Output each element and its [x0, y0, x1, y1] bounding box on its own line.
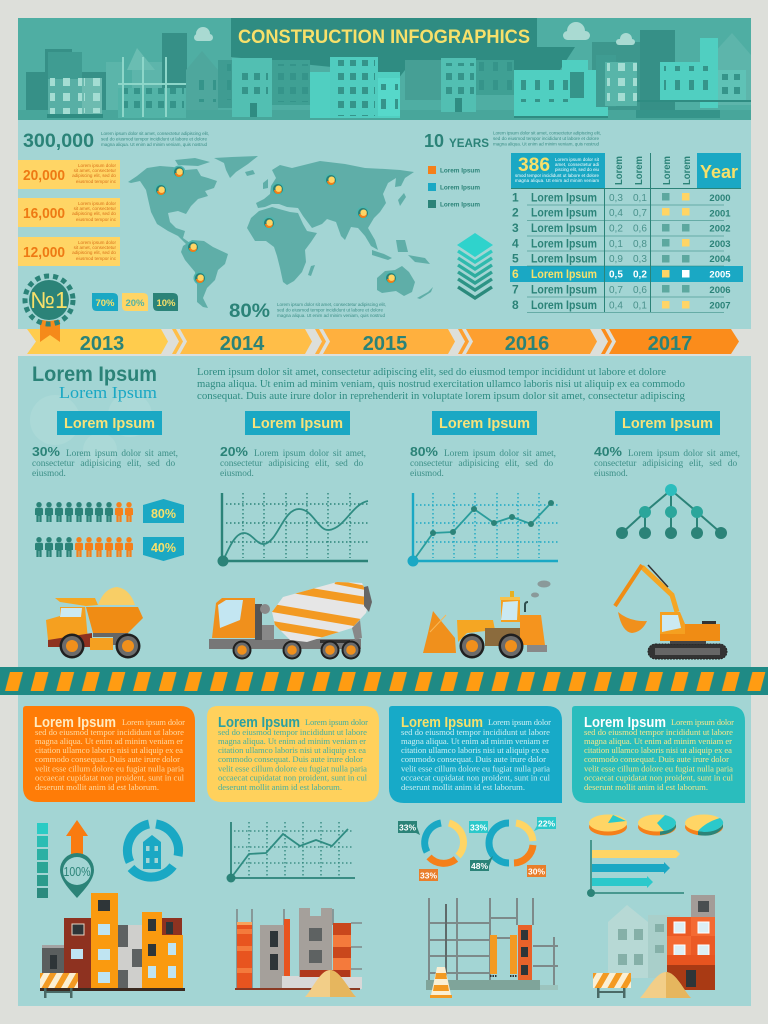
- pie chart 3: [685, 814, 723, 836]
- card: teal: velit esse cillum dolore eu fugiat nulla paria: [584, 764, 733, 774]
- column heading 2: Lorem Ipsum: [252, 416, 343, 432]
- donut chart 1: [425, 823, 463, 863]
- stat: 10 years: Lorem ipsum dolor sit amet, consectetur adipiscing elit,: [493, 130, 601, 136]
- card: teal: commodo consequat. Duis aute irure dolor: [584, 754, 729, 764]
- row values: 0,4: [609, 300, 623, 312]
- line chart: bottom: [226, 822, 355, 882]
- gradient scale squares: [37, 823, 48, 898]
- card: blue: Lorem ipsum dolor: [488, 717, 551, 727]
- timeline segment: 2013: 2013: [80, 333, 124, 355]
- column text 3: Lorem ipsum dolor sit amet,: [444, 449, 556, 459]
- stat box: 20,000: [18, 160, 120, 189]
- row numbers and labels: [512, 190, 597, 312]
- row values: 0,3: [633, 254, 647, 265]
- row numbers and labels: 2: [512, 206, 519, 220]
- stat box: 12,000: eiusmod tempor inc: [76, 256, 117, 261]
- stat: 10 years: YEARS: [449, 138, 489, 150]
- row values: 0,4: [609, 208, 623, 219]
- column heading 3: [432, 411, 537, 435]
- icon: up arrow: [66, 820, 88, 854]
- column heading 2: [245, 411, 350, 435]
- row numbers and labels: 1: [512, 190, 519, 204]
- row values: 0,7: [609, 285, 623, 296]
- card: orange: magna aliqua. Ut enim ad minim veniam er: [35, 736, 183, 746]
- row numbers and labels: 4: [512, 236, 519, 250]
- timeline segment: 2017: 2017: [648, 333, 692, 355]
- illustration: orange building block: [40, 893, 185, 998]
- illustration: block under construction: [235, 908, 362, 997]
- donut label: 48% dark: [470, 856, 493, 871]
- column text 2: consectetur adipisicing elit, sed do: [220, 459, 363, 469]
- card: blue: magna aliqua. Ut enim ad minim veniam er: [401, 736, 549, 746]
- intro paragraph: magna aliqua. Ut enim ad minim veniam, quis nostrud exercitation ullamco laboris nisi ut aliquip ex ea commodo: [197, 379, 685, 390]
- pie chart 1: [589, 814, 627, 836]
- top panel background: [18, 120, 751, 329]
- percent tag: 10%: [153, 293, 178, 311]
- stat: 300,000: Lorem ipsum dolor sit amet, consectetur adipiscing elit,: [101, 131, 209, 136]
- timeline segment: 2017: [601, 329, 739, 355]
- column text 3: [410, 444, 556, 479]
- row values: 0,9: [609, 254, 623, 265]
- card: yellow: occaecat cupidatat non proident, sunt in cul: [218, 772, 368, 782]
- stat box: 16,000: eiusmod tempor inc: [76, 217, 117, 222]
- legend: Lorem Ipsum: [440, 184, 480, 192]
- stat: 300,000: 300,000: [23, 131, 94, 152]
- stat box: 20,000: eiusmod tempor inc: [76, 179, 117, 184]
- row numbers and labels: 8: [512, 298, 519, 312]
- row values: [609, 193, 647, 312]
- card: teal: citation ullamco laboris nisi ut aliquip ex ea: [584, 745, 732, 755]
- section heading: Lorem Ipsum: [59, 383, 157, 402]
- badge: No 1 medal: №1: [30, 287, 68, 313]
- timeline segment: 2015: [315, 329, 455, 355]
- card: yellow: citation ullamco laboris nisi ut aliquip ex ea: [218, 745, 366, 755]
- column headers: Lorem: [633, 156, 645, 185]
- decorative gears: [30, 393, 152, 467]
- section heading: [32, 363, 157, 402]
- card: orange: Lorem Ipsum: [34, 714, 116, 731]
- column text 4: consectetur adipisicing elit, sed do: [594, 459, 737, 469]
- card: orange: velit esse cillum dolore eu fugiat nulla paria: [35, 764, 184, 774]
- people chart: 80% row: 80%: [151, 507, 176, 521]
- card: teal: magna aliqua. Ut enim ad minim veniam er: [584, 736, 732, 746]
- card: orange: [23, 706, 195, 802]
- donut label: 33% dark: 33%: [399, 822, 416, 832]
- stat box: 16,000: [18, 198, 120, 227]
- row numbers and labels: Lorem Ipsum: [531, 282, 597, 296]
- donut label: 22% cyan: [534, 817, 556, 831]
- bar chart with arrows: [587, 840, 684, 897]
- buildings: [47, 38, 751, 118]
- table header: 386: smod tempor incididunt ut labore et dolore: [515, 173, 600, 178]
- row numbers and labels: Lorem Ipsum: [531, 298, 597, 312]
- row numbers and labels: Lorem Ipsum: [531, 267, 597, 281]
- card: teal: Lorem Ipsum: [584, 714, 666, 731]
- timeline segment: 2014: 2014: [220, 333, 265, 355]
- timeline segment: 2015: 2015: [363, 333, 407, 355]
- legend: Lorem Ipsum: [440, 202, 480, 208]
- table header: 386: [511, 153, 605, 188]
- percent tag: 20%: 20%: [125, 298, 145, 309]
- column text 4: eiusmod.: [594, 469, 628, 479]
- row numbers and labels: Lorem Ipsum: [531, 206, 597, 220]
- vehicle: wheel loader: [423, 580, 550, 658]
- row numbers and labels: 7: [512, 282, 519, 296]
- year column: 2005: [709, 270, 731, 280]
- year column: 2002: [709, 224, 731, 234]
- card: blue: commodo consequat. Duis aute irure dolor: [401, 754, 546, 764]
- column text 2: Lorem ipsum dolor sit amet,: [254, 449, 366, 459]
- donut label: 33% orange: 33%: [420, 870, 437, 880]
- column text 2: 20%: [220, 444, 248, 459]
- timeline segment: 2013: [27, 329, 168, 355]
- row numbers and labels: Lorem Ipsum: [531, 190, 597, 204]
- card: teal: Lorem ipsum dolor: [671, 717, 734, 727]
- stat: 10 years: sed do eiusmod tempor incididunt ut labore et dolore: [493, 136, 599, 141]
- icon: 100% map pin: [60, 853, 94, 898]
- people chart: 40% row: 40%: [151, 541, 176, 555]
- stat: 80%: Lorem ipsum dolor sit amet, consectetur adipiscing elit,: [277, 302, 386, 307]
- column headers: [613, 156, 693, 185]
- legend: Lorem Ipsum: [440, 168, 480, 174]
- year column: 2001: [709, 208, 731, 220]
- title band: [231, 18, 575, 105]
- row values: 0,2: [609, 224, 623, 234]
- stat: 300,000: magna aliqua. Ut enim ad minim veniam, quis nostrud: [101, 142, 207, 147]
- column heading 4: Lorem Ipsum: [622, 416, 713, 432]
- stat: 80%: magna aliqua. Ut enim ad minim veniam, quis nostrud: [277, 313, 385, 318]
- intro paragraph: consequat. Duis aute irure dolor in reprehenderit in voluptate lorem ipsum dolor sit amet, consectetur adipiscing: [197, 391, 686, 402]
- stat box: 16,000: Lorem ipsum dolor: [78, 201, 116, 206]
- column headers: Lorem: [613, 156, 625, 185]
- column text 3: 80%: [410, 444, 438, 459]
- vehicle: excavator: [615, 565, 727, 659]
- column text 3: eiusmod.: [410, 469, 444, 479]
- table header: 386: Lorem ipsum dolor sit: [555, 157, 600, 162]
- card: blue: citation ullamco laboris nisi ut aliquip ex ea: [401, 745, 549, 755]
- table header: 386: magna aliqua. Ut enim ad minim veniam: [515, 178, 599, 183]
- year column: 2000: [709, 193, 731, 204]
- column heading 3: Lorem Ipsum: [439, 416, 530, 432]
- hazard stripe band: [0, 667, 768, 695]
- card: yellow: commodo consequat. Duis aute irure dolor: [218, 754, 363, 764]
- card: orange: deserunt mollit anim id est laborum.: [35, 782, 159, 792]
- stat: 80%: sed do eiusmod tempor incididunt ut labore et dolore: [277, 308, 383, 312]
- card: blue: Lorem Ipsum: [401, 714, 483, 731]
- card: blue: [389, 706, 562, 803]
- stat: 300,000: sed do eiusmod tempor incididunt ut labore et dolore: [101, 136, 207, 142]
- row values: 0,2: [633, 270, 647, 280]
- card: blue: velit esse cillum dolore eu fugiat nulla paria: [401, 764, 550, 774]
- column text 4: Lorem ipsum dolor sit amet,: [628, 449, 740, 459]
- stat box: 12,000: Lorem ipsum dolor: [78, 240, 116, 245]
- stat: 300,000: [23, 131, 209, 152]
- stat box: 16,000: sit amet, consectetur: [74, 206, 116, 211]
- timeline ribbon: [27, 329, 739, 355]
- year column: [709, 193, 731, 312]
- stat box: 20,000: Lorem ipsum dolor: [78, 163, 116, 168]
- stat box: 12,000: adipiscing elit, sed do: [72, 250, 116, 255]
- column text 1: consectetur adipisicing elit, sed do: [32, 459, 175, 469]
- stat box: 12,000: 12,000: [23, 244, 65, 261]
- intro paragraph: Lorem ipsum dolor sit amet, consectetur adipiscing elit, sed do eiusmod tempor incididunt ut labore et dolore: [197, 367, 666, 378]
- year column: 2007: [709, 300, 731, 312]
- card: yellow: velit esse cillum dolore eu fugiat nulla paria: [218, 764, 367, 774]
- column heading 1: Lorem Ipsum: [64, 416, 155, 432]
- donut label: 48% dark: 48%: [471, 861, 488, 871]
- row numbers and labels: 5: [512, 252, 519, 266]
- donut chart 2: [489, 823, 533, 863]
- stat box: 16,000: 16,000: [23, 205, 65, 222]
- column text 4: 40%: [594, 444, 622, 459]
- card: orange: occaecat cupidatat non proident, sunt in cul: [35, 772, 185, 782]
- column text 1: Lorem ipsum dolor sit amet,: [66, 449, 178, 459]
- year header: [697, 153, 741, 188]
- skyline back layer: [18, 30, 751, 120]
- card: orange: citation ullamco laboris nisi ut aliquip ex ea: [35, 745, 183, 755]
- tree diagram: [616, 484, 727, 539]
- stat box: 20,000: 20,000: [23, 167, 65, 184]
- section heading: Lorem Ipsum: [32, 363, 157, 386]
- card: blue: sed do eiusmod tempor incididunt ut labore: [401, 727, 550, 737]
- card: blue: deserunt mollit anim id est laborum.: [401, 782, 525, 792]
- table header: 386: piscing elit, sed do eiu: [555, 167, 600, 172]
- stat box: 20,000: sit amet, consectetur: [74, 168, 116, 173]
- column text 1: [32, 444, 178, 479]
- card: yellow: Lorem ipsum dolor: [305, 717, 368, 727]
- column heading 4: [615, 411, 720, 435]
- percent tag: 70%: [92, 293, 118, 311]
- legend: [428, 166, 480, 208]
- card: orange: sed do eiusmod tempor incididunt ut labore: [35, 727, 184, 737]
- year column: 2003: [709, 239, 731, 250]
- percent tag: 10%: 10%: [156, 298, 176, 309]
- percent tag: 20%: [122, 293, 148, 311]
- stat: 10 years: 10: [424, 131, 444, 151]
- stat: 10 years: [424, 130, 601, 151]
- column text 4: [594, 444, 740, 479]
- header panel: city skyline: [18, 18, 751, 120]
- illustration: scaffold: [426, 898, 558, 990]
- card: blue: occaecat cupidatat non proident, sunt in cul: [401, 772, 551, 782]
- row values: 0,8: [633, 239, 647, 250]
- card: yellow: [207, 706, 379, 802]
- stat: 80%: [229, 301, 386, 322]
- donut label: 33% cyan: 33%: [470, 822, 487, 832]
- stat box: 20,000: adipiscing elit, sed do: [72, 173, 116, 178]
- stat box: 12,000: [18, 237, 120, 266]
- card: yellow: sed do eiusmod tempor incididunt ut labore: [218, 727, 367, 737]
- row numbers and labels: Lorem Ipsum: [531, 221, 597, 235]
- stat: 10 years: magna aliqua. Ut enim ad minim veniam, quis nostrud: [493, 142, 599, 146]
- row numbers and labels: Lorem Ipsum: [531, 252, 597, 266]
- row values: 0,7: [633, 208, 647, 219]
- card: teal: [572, 706, 745, 803]
- title: CONSTRUCTION INFOGRAPHICS: [238, 27, 530, 48]
- card: yellow: Lorem Ipsum: [218, 714, 300, 731]
- icon: 100% map pin: 100%: [64, 865, 90, 879]
- column headers: Lorem: [681, 156, 693, 185]
- stat box: 16,000: adipiscing elit, sed do: [72, 211, 116, 216]
- column text 1: eiusmod.: [32, 469, 66, 479]
- card: orange: commodo consequat. Duis aute irure dolor: [35, 754, 180, 764]
- row values: 0,6: [633, 285, 647, 296]
- column headers: Lorem: [661, 156, 673, 185]
- card: yellow: magna aliqua. Ut enim ad minim veniam er: [218, 736, 366, 746]
- vehicle: cement mixer: [209, 578, 374, 660]
- row values: 0,3: [609, 193, 623, 204]
- pie chart 2: [638, 814, 676, 836]
- donut label: 30% orange: 30%: [528, 866, 545, 876]
- highlighted row: [510, 266, 743, 282]
- vehicle: dump truck: [46, 587, 143, 658]
- year column: 2004: [709, 254, 731, 265]
- year header: Year: [700, 162, 738, 182]
- row markers: [662, 193, 690, 308]
- icon: traffic cone: [430, 967, 452, 998]
- donut label: 33% dark: [398, 821, 420, 835]
- line chart: smooth curve: [218, 493, 368, 566]
- card: teal: sed do eiusmod tempor incididunt ut labore: [584, 727, 733, 737]
- card: yellow: deserunt mollit anim id est laborum.: [218, 782, 342, 792]
- card: teal: deserunt mollit anim id est laborum.: [584, 782, 708, 792]
- column text 3: consectetur adipisicing elit, sed do: [410, 459, 553, 469]
- year column: 2006: [709, 285, 731, 296]
- table rules: [511, 153, 741, 312]
- table header: 386: 386: [518, 155, 550, 176]
- donut label: 22% cyan: 22%: [538, 818, 555, 828]
- badge: No 1 medal: [25, 276, 73, 342]
- icon: house in recycling ring: [127, 824, 179, 877]
- illustration: houses with barrier and sand: [593, 895, 715, 998]
- line chart: points: [408, 493, 558, 566]
- intro paragraph: [197, 367, 686, 402]
- row numbers and labels: 3: [512, 221, 519, 235]
- row values: 0,6: [633, 224, 647, 234]
- timeline segment: 2016: [458, 329, 597, 355]
- row values: 0,1: [633, 300, 647, 312]
- world map: [128, 156, 433, 308]
- percent tag: 70%: 70%: [95, 298, 115, 309]
- lower panel background: [18, 356, 751, 1006]
- people chart: 80% row: [35, 499, 184, 523]
- row values: 0,1: [633, 193, 647, 204]
- clouds: [194, 22, 635, 45]
- map pins: [154, 166, 398, 284]
- column text 2: [220, 444, 366, 479]
- timeline segment: 2016: 2016: [505, 333, 549, 355]
- table header: 386: amet, consectetur adi: [555, 162, 599, 167]
- card: teal: occaecat cupidatat non proident, sunt in cul: [584, 772, 734, 782]
- card: orange: Lorem ipsum dolor: [122, 717, 185, 727]
- icon: layer stack: [457, 233, 493, 298]
- data table: [510, 153, 743, 312]
- timeline segment: 2014: [172, 329, 312, 355]
- stat box: 12,000: sit amet, consectetur: [74, 245, 116, 250]
- stat: 80%: 80%: [229, 301, 270, 322]
- column heading 1: [57, 411, 162, 435]
- people chart: 40% row: [35, 537, 184, 561]
- column text 1: 30%: [32, 444, 60, 459]
- row values: 0,5: [609, 270, 623, 280]
- row values: 0,1: [609, 239, 623, 250]
- row numbers and labels: Lorem Ipsum: [531, 236, 597, 250]
- column text 2: eiusmod.: [220, 469, 254, 479]
- row numbers and labels: 6: [512, 267, 519, 281]
